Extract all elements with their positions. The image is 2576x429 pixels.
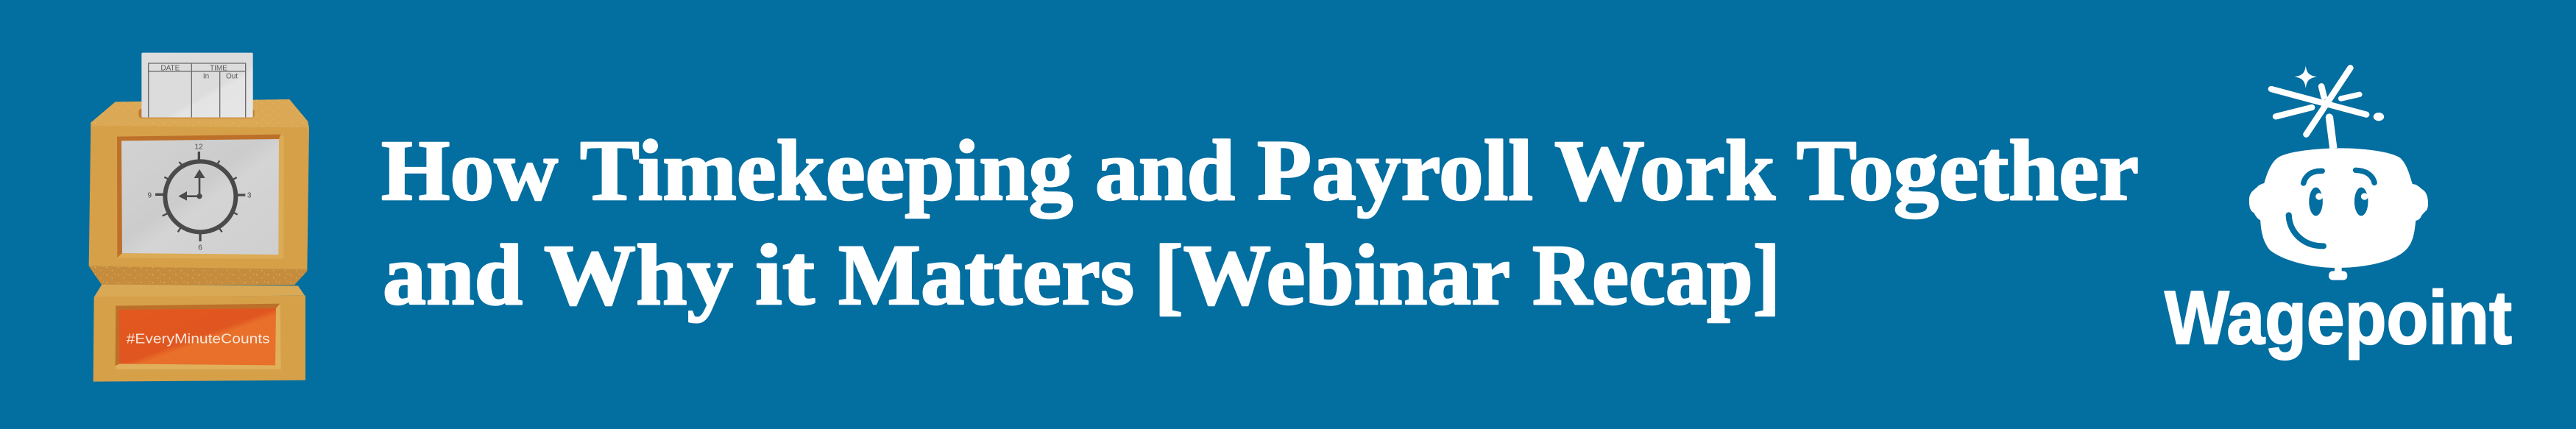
title: Why bbox=[544, 227, 733, 323]
title: and bbox=[1095, 122, 1235, 219]
title: Recap] bbox=[1532, 227, 1780, 323]
logo icon: robot head bbox=[2249, 65, 2428, 280]
time card: Out bbox=[226, 72, 238, 80]
time card bbox=[141, 53, 253, 118]
machine upper top bevel bbox=[91, 99, 309, 129]
head bbox=[2249, 148, 2428, 268]
title: Matters bbox=[838, 227, 1134, 323]
title: and bbox=[383, 227, 523, 323]
title: Together bbox=[1797, 122, 2139, 219]
machine lower front face bbox=[93, 296, 305, 382]
clock face: 6 bbox=[198, 244, 202, 252]
hashtag text: #EveryMinuteCounts bbox=[127, 331, 270, 347]
title: Payroll bbox=[1257, 122, 1533, 219]
logo wordmark: Wagepoint bbox=[2165, 275, 2512, 360]
illustration: punch time clock bbox=[89, 53, 309, 382]
clock hands bbox=[178, 169, 205, 201]
clock face: 12 bbox=[194, 143, 203, 152]
title bbox=[381, 122, 2139, 323]
machine neck bbox=[89, 266, 307, 285]
machine upper front face bbox=[89, 126, 309, 271]
logo: Wagepoint bbox=[2165, 65, 2512, 360]
clock window recess bbox=[117, 135, 281, 258]
time card: In bbox=[203, 72, 209, 80]
hashtag panel recess bbox=[116, 304, 280, 366]
clock face: 3 bbox=[247, 191, 252, 199]
time card: DATE bbox=[160, 64, 180, 72]
title: Work bbox=[1554, 122, 1775, 219]
clock face bbox=[148, 143, 252, 252]
spark bbox=[2271, 68, 2366, 149]
title: How bbox=[381, 122, 558, 219]
title: it bbox=[755, 227, 815, 323]
card slot bbox=[138, 108, 255, 118]
time card: TIME bbox=[210, 64, 227, 72]
title: Timekeeping bbox=[580, 122, 1073, 219]
hashtag panel bbox=[119, 308, 276, 365]
machine lower top bevel bbox=[94, 285, 305, 297]
title: [Webinar bbox=[1154, 227, 1510, 323]
clock window bbox=[121, 139, 279, 255]
clock face: 9 bbox=[148, 191, 152, 199]
face bbox=[2289, 170, 2374, 246]
